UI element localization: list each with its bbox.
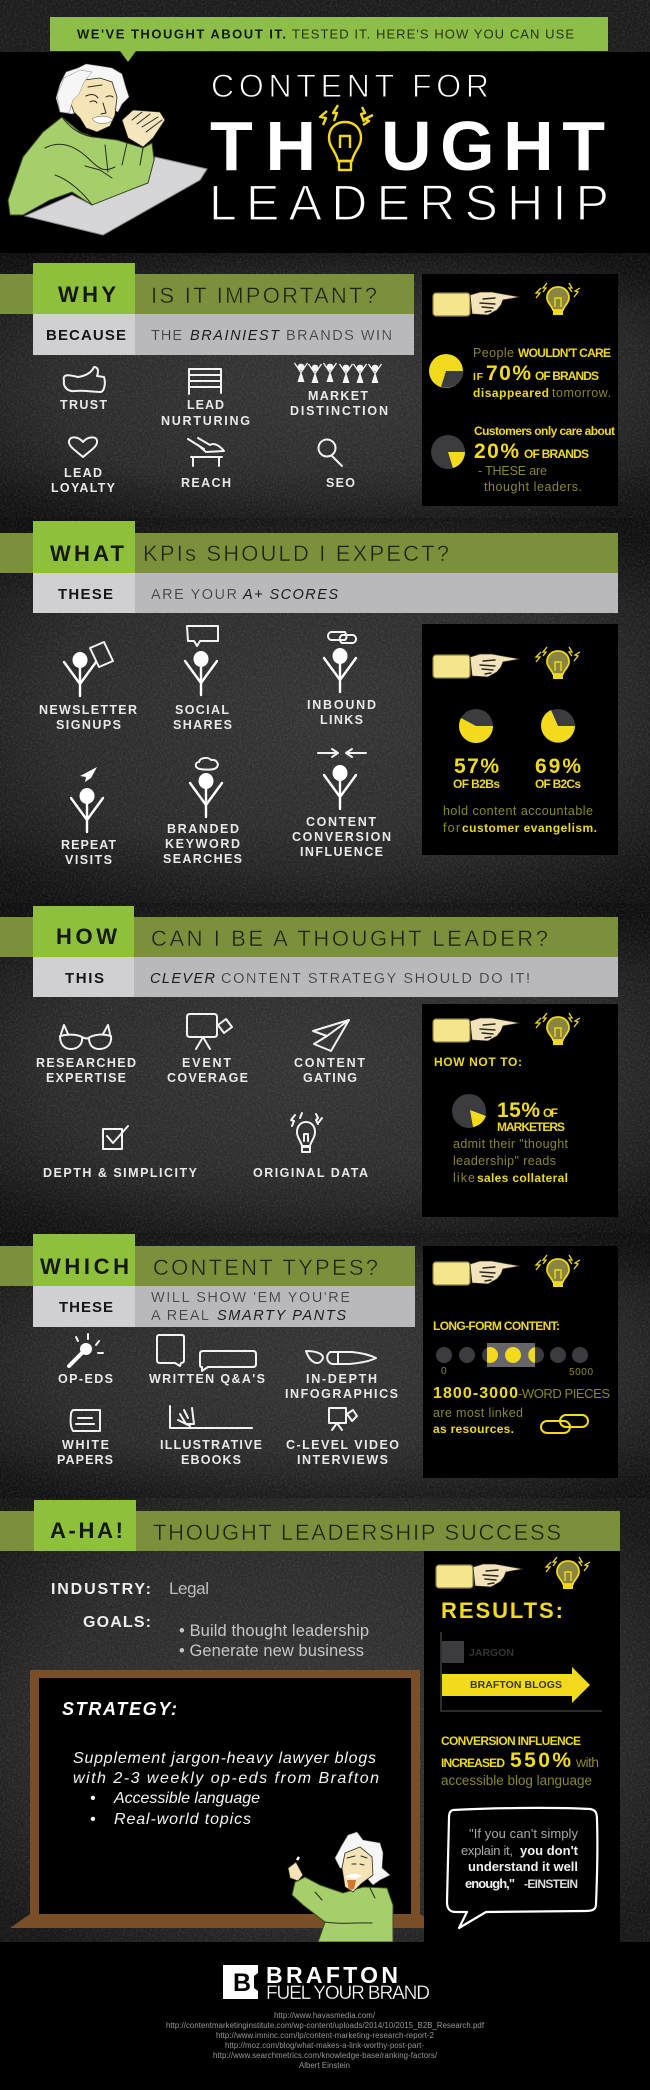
stat text: 70% bbox=[473, 346, 611, 400]
item: white papers: PAPERS bbox=[57, 1453, 113, 1467]
item: newsletter signups: NEWSLETTER bbox=[39, 703, 137, 717]
item: content conversion influence bbox=[292, 749, 391, 859]
subheading band: because: BECAUSE bbox=[46, 327, 126, 344]
item: lead loyalty: LEAD bbox=[64, 466, 102, 480]
speech bubble: Einstein quote: you don't bbox=[520, 1843, 579, 1858]
stat text: 20%: OF BRANDS bbox=[524, 447, 589, 461]
speech bubble: Einstein quote: understand it well bbox=[468, 1859, 578, 1874]
stat caption: hold content accountable bbox=[443, 804, 593, 818]
stat text: 20%: Customers only care about bbox=[474, 424, 615, 438]
speech banner bbox=[50, 17, 608, 62]
item: social shares bbox=[173, 626, 232, 732]
item: content conversion influence: CONVERSION bbox=[292, 830, 391, 844]
heading band: how: CAN I BE A THOUGHT LEADER? bbox=[151, 926, 548, 951]
title: UGHT bbox=[381, 107, 605, 185]
stat text: 20%: thought leaders. bbox=[484, 480, 582, 494]
section: how bbox=[0, 906, 618, 1217]
item: researched expertise: EXPERTISE bbox=[46, 1071, 126, 1085]
dot scale chart bbox=[436, 1343, 593, 1378]
icon: pointing hand bbox=[433, 292, 520, 316]
section: a-ha bbox=[0, 1500, 620, 1942]
pie chart: 70% bbox=[429, 354, 463, 388]
item: trust bbox=[60, 367, 107, 412]
heading band: why: WHY bbox=[58, 282, 116, 307]
subheading band: this: THIS bbox=[65, 970, 104, 987]
item: social shares: SHARES bbox=[173, 718, 232, 732]
stat text: word count: 1800-3000 bbox=[433, 1385, 518, 1402]
heading band: a-ha: A-HA! bbox=[50, 1518, 123, 1543]
item: op-eds bbox=[58, 1334, 113, 1386]
heading band: why: IS IT IMPORTANT? bbox=[151, 283, 377, 308]
item: market distinction: MARKET bbox=[308, 389, 368, 403]
icon: pointing hand bbox=[436, 1564, 523, 1588]
subheading band: because: BRAINIEST bbox=[190, 328, 280, 344]
item: illustrative ebooks: ILLUSTRATIVE bbox=[160, 1438, 262, 1452]
subheading band: these: ARE YOUR bbox=[151, 587, 237, 603]
stat text: 550%: INCREASED bbox=[441, 1756, 505, 1770]
item: original data bbox=[253, 1113, 368, 1180]
illustration: Einstein pointing bbox=[288, 1832, 393, 1942]
heading band: a-ha: THOUGHT LEADERSHIP SUCCESS bbox=[153, 1520, 561, 1545]
heading band: which: WHICH bbox=[40, 1254, 129, 1279]
heading band: what bbox=[0, 521, 618, 573]
stat text: 550%: 550% bbox=[510, 1749, 571, 1772]
subheading band: these: A REAL bbox=[151, 1308, 209, 1324]
subheading band: these: THESE bbox=[59, 1299, 113, 1316]
stat: 69% of B2Cs bbox=[535, 755, 581, 791]
logo: Brafton: BRAFTON bbox=[266, 1962, 398, 1988]
chalkboard text bbox=[73, 1750, 379, 1828]
logo: Brafton bbox=[223, 1962, 430, 2004]
stat text: word count: as resources. bbox=[433, 1422, 514, 1436]
heading band: which: CONTENT TYPES? bbox=[153, 1255, 378, 1280]
chalkboard text: • bbox=[90, 1811, 96, 1828]
case details: • Build thought leadership bbox=[179, 1622, 369, 1640]
stat text: 15%: OF bbox=[543, 1106, 558, 1120]
logo: Brafton: B bbox=[233, 1969, 251, 1997]
logo: Brafton: FUEL YOUR BRAND bbox=[266, 1983, 430, 2004]
case details bbox=[51, 1579, 369, 1660]
icon: bulb bbox=[536, 1255, 580, 1287]
subheading band: these bbox=[33, 1286, 415, 1327]
heading band: which bbox=[0, 1234, 415, 1286]
stat: 57% of B2Bs: OF B2Bs bbox=[453, 777, 500, 791]
icon: chain link bbox=[541, 1415, 588, 1433]
item: branded keyword searches: KEYWORD bbox=[165, 837, 240, 851]
item: lead loyalty bbox=[51, 437, 116, 495]
subheading band: because: THE bbox=[151, 328, 182, 344]
panel: which stats bbox=[423, 1246, 618, 1478]
item: inbound links: INBOUND bbox=[307, 698, 376, 712]
stat caption bbox=[443, 804, 597, 835]
speech bubble: Einstein quote: enough," bbox=[465, 1876, 515, 1891]
icon: bulb bbox=[536, 647, 580, 679]
title: LEADERSHIP bbox=[209, 175, 609, 231]
item: content conversion influence: INFLUENCE bbox=[300, 845, 383, 859]
panel: why stats bbox=[422, 274, 618, 506]
item: in-depth infographics: IN-DEPTH bbox=[306, 1372, 377, 1386]
item: content gating bbox=[294, 1020, 365, 1085]
chalkboard text: with 2-3 weekly op-eds from Brafton bbox=[73, 1770, 379, 1787]
heading: results: RESULTS: bbox=[441, 1598, 563, 1623]
item: inbound links bbox=[307, 632, 376, 727]
subheading band: because bbox=[33, 314, 414, 355]
stat: 69% of B2Cs: OF B2Cs bbox=[535, 777, 581, 791]
icon: bulb bbox=[536, 283, 580, 315]
sources: http://moz.com/blog/what-makes-a-link-worthy-post-part- bbox=[225, 2041, 424, 2050]
item: written Q&A bbox=[149, 1335, 265, 1386]
icon: pointing hand bbox=[433, 1018, 520, 1042]
item: white papers bbox=[57, 1410, 113, 1467]
item: illustrative ebooks bbox=[160, 1406, 262, 1467]
item: illustrative ebooks: EBOOKS bbox=[181, 1453, 241, 1467]
item: written Q&A: WRITTEN Q&A'S bbox=[149, 1372, 265, 1386]
heading band: why bbox=[0, 263, 414, 314]
speech banner: WE'VE THOUGHT ABOUT IT. bbox=[77, 26, 286, 42]
stat text: 70%: IF bbox=[473, 371, 484, 383]
stat text: 20%: 20% bbox=[474, 440, 519, 463]
stat text: 70%: People bbox=[473, 346, 514, 360]
subheading band: these: THESE bbox=[58, 586, 113, 603]
stat text: 70%: disappeared bbox=[473, 386, 549, 400]
section: what bbox=[0, 521, 618, 867]
stat text: 70%: 70% bbox=[486, 362, 531, 385]
item: inbound links: LINKS bbox=[320, 713, 363, 727]
bar chart: jargon vs Brafton blogs: JARGON bbox=[469, 1647, 514, 1659]
title: TH bbox=[210, 107, 316, 185]
dot scale chart: 0 bbox=[441, 1366, 447, 1377]
sources: http://www.havasmedia.com/ bbox=[274, 2011, 376, 2020]
pie chart: 20% bbox=[431, 435, 465, 469]
item: lead loyalty: LOYALTY bbox=[51, 481, 116, 495]
chalkboard text: Real-world topics bbox=[114, 1811, 251, 1828]
header panel bbox=[0, 17, 650, 253]
subheading band: these: A+ SCORES bbox=[242, 587, 338, 603]
title bbox=[209, 68, 609, 231]
heading band: what: WHAT bbox=[50, 541, 125, 566]
subheading band: these: SMARTY PANTS bbox=[217, 1308, 346, 1324]
item: content gating: GATING bbox=[303, 1071, 357, 1085]
bar chart: jargon vs Brafton blogs bbox=[441, 1632, 602, 1711]
item: repeat visits bbox=[61, 767, 116, 867]
stat text: 550% bbox=[441, 1734, 599, 1788]
subheading band: these bbox=[33, 573, 618, 613]
item: market distinction bbox=[290, 363, 388, 418]
item: branded keyword searches: SEARCHES bbox=[163, 852, 242, 866]
item: researched expertise: RESEARCHED bbox=[36, 1056, 136, 1070]
section: which bbox=[0, 1234, 618, 1478]
stat text: 550%: CONVERSION INFLUENCE bbox=[441, 1734, 581, 1748]
case details: GOALS: bbox=[83, 1614, 151, 1631]
stat text: 70%: OF BRANDS bbox=[535, 369, 599, 383]
item: event coverage bbox=[167, 1014, 248, 1085]
stat text: 20%: - THESE are bbox=[478, 464, 547, 478]
stat text: 15%: 15% bbox=[497, 1099, 540, 1122]
item: repeat visits: VISITS bbox=[65, 853, 112, 867]
stat text: 15%: sales collateral bbox=[477, 1171, 568, 1185]
icon: pointing hand bbox=[433, 1261, 520, 1285]
item: depth and simplicity bbox=[43, 1126, 198, 1180]
panel: results bbox=[424, 1551, 620, 1942]
item: seo bbox=[318, 440, 355, 490]
item: event coverage: COVERAGE bbox=[167, 1071, 248, 1085]
section: why bbox=[0, 263, 618, 506]
sources: http://contentmarketinginstitute.com/wp-content/uploads/2014/10/2015_B2B_Research.pdf bbox=[166, 2021, 485, 2030]
pie chart: 69% bbox=[541, 709, 575, 743]
item: reach bbox=[181, 438, 231, 490]
item: op-eds: OP-EDS bbox=[58, 1372, 113, 1386]
pie chart: 57% bbox=[459, 709, 493, 743]
heading: long-form content: LONG-FORM CONTENT: bbox=[433, 1319, 560, 1333]
speech banner: TESTED IT. HERE'S HOW YOU CAN USE bbox=[292, 26, 574, 42]
item: in-depth infographics: INFOGRAPHICS bbox=[285, 1387, 398, 1401]
icon: bulb bbox=[536, 1013, 580, 1045]
item: reach: REACH bbox=[181, 476, 231, 490]
subheading band: this: CLEVER bbox=[150, 971, 216, 987]
item: newsletter signups: SIGNUPS bbox=[56, 718, 121, 732]
panel: how stats bbox=[422, 1004, 618, 1217]
pie chart: 15% bbox=[452, 1094, 486, 1128]
icon: pointing hand bbox=[433, 654, 520, 678]
speech bubble: Einstein quote bbox=[447, 1808, 597, 1928]
title: CONTENT FOR bbox=[211, 68, 489, 104]
sources: http://www.searchmetrics.com/knowledge-base/ranking-factors/ bbox=[213, 2051, 438, 2060]
stat text: word count: -WORD PIECES bbox=[518, 1386, 610, 1401]
item: content gating: CONTENT bbox=[294, 1056, 365, 1070]
item: event coverage: EVENT bbox=[182, 1056, 231, 1070]
heading band: what: KPIs SHOULD I EXPECT? bbox=[143, 541, 449, 566]
icon: bulb bbox=[546, 1557, 590, 1589]
item: newsletter signups bbox=[39, 642, 137, 732]
chalkboard text: • bbox=[90, 1790, 96, 1807]
illustration: Einstein at desk bbox=[8, 64, 207, 235]
footer bbox=[0, 1942, 650, 2090]
item: depth and simplicity: DEPTH & SIMPLICITY bbox=[43, 1166, 198, 1180]
item: original data: ORIGINAL DATA bbox=[253, 1166, 368, 1180]
stat text: 550%: accessible blog language bbox=[441, 1773, 592, 1788]
heading band: how bbox=[0, 906, 618, 957]
item: c-level video interviews bbox=[286, 1408, 399, 1467]
heading band: a-ha bbox=[0, 1500, 620, 1551]
item: lead nurturing: LEAD bbox=[187, 398, 224, 412]
stat: 57% of B2Bs bbox=[453, 755, 500, 791]
item: researched expertise bbox=[36, 1025, 136, 1085]
bar chart: jargon vs Brafton blogs: BRAFTON BLOGS bbox=[470, 1679, 562, 1691]
chalkboard text: Accessible language bbox=[113, 1790, 260, 1807]
item: social shares: SOCIAL bbox=[175, 703, 229, 717]
panel: what stats bbox=[422, 624, 618, 855]
sources: Albert Einstein bbox=[299, 2061, 350, 2070]
stat text: 15% bbox=[453, 1099, 569, 1185]
item: c-level video interviews: C-LEVEL VIDEO bbox=[286, 1438, 399, 1452]
stat text: word count bbox=[433, 1385, 610, 1436]
stat text: 20% bbox=[474, 424, 615, 494]
stat caption: customer evangelism. bbox=[462, 821, 597, 835]
stat text: 15%: leadership" reads bbox=[453, 1154, 556, 1168]
stat text: 15%: like bbox=[453, 1171, 475, 1185]
item: branded keyword searches: BRANDED bbox=[167, 822, 239, 836]
item: seo: SEO bbox=[326, 476, 355, 490]
item: content conversion influence: CONTENT bbox=[306, 815, 376, 829]
stat text: 550%: with bbox=[575, 1754, 599, 1770]
stat text: 70%: tomorrow. bbox=[552, 386, 611, 400]
stat caption: for bbox=[443, 821, 460, 835]
item: in-depth infographics bbox=[285, 1351, 398, 1401]
heading band: how: HOW bbox=[56, 924, 117, 949]
stat text: 70%: WOULDN'T CARE bbox=[518, 346, 611, 360]
sources: http://www.imninc.com/lp/content-marketing-research-report-2 bbox=[216, 2031, 434, 2040]
item: white papers: WHITE bbox=[62, 1438, 109, 1452]
item: lead nurturing bbox=[161, 369, 250, 428]
icon: light bulb in title bbox=[320, 105, 373, 170]
speech bubble: Einstein quote: -EINSTEIN bbox=[524, 1877, 578, 1891]
item: market distinction: DISTINCTION bbox=[290, 404, 388, 418]
stat: 69% of B2Cs: 69% bbox=[535, 755, 581, 778]
chalkboard bbox=[10, 1670, 440, 1942]
subheading band: these: WILL SHOW 'EM YOU'RE bbox=[151, 1290, 350, 1306]
stat text: word count: are most linked bbox=[433, 1406, 523, 1420]
item: trust: TRUST bbox=[60, 398, 107, 412]
item: repeat visits: REPEAT bbox=[61, 838, 116, 852]
subheading band: because: BRANDS WIN bbox=[286, 328, 392, 344]
stat text: 15%: MARKETERS bbox=[497, 1120, 565, 1134]
heading: how not to: HOW NOT TO: bbox=[434, 1055, 522, 1069]
subheading band: this: CONTENT STRATEGY SHOULD DO IT! bbox=[221, 971, 530, 987]
case details: • Generate new business bbox=[179, 1642, 364, 1660]
item: branded keyword searches bbox=[163, 758, 242, 866]
chalkboard text: Supplement jargon-heavy lawyer blogs bbox=[73, 1750, 376, 1767]
dot scale chart: 5000 bbox=[569, 1367, 593, 1378]
sources bbox=[166, 2011, 485, 2070]
case details: INDUSTRY: bbox=[51, 1581, 151, 1598]
speech bubble: Einstein quote: "If you can't simply bbox=[469, 1826, 578, 1841]
speech bubble: Einstein quote: explain it, bbox=[461, 1843, 513, 1858]
subheading band: this bbox=[33, 957, 618, 997]
item: c-level video interviews: INTERVIEWS bbox=[297, 1453, 388, 1467]
case details: Legal bbox=[169, 1579, 209, 1598]
stat text: 15%: admit their "thought bbox=[453, 1137, 569, 1151]
stat: 57% of B2Bs: 57% bbox=[454, 755, 499, 778]
item: lead nurturing: NURTURING bbox=[161, 414, 250, 428]
chalkboard heading: STRATEGY: bbox=[62, 1699, 177, 1719]
